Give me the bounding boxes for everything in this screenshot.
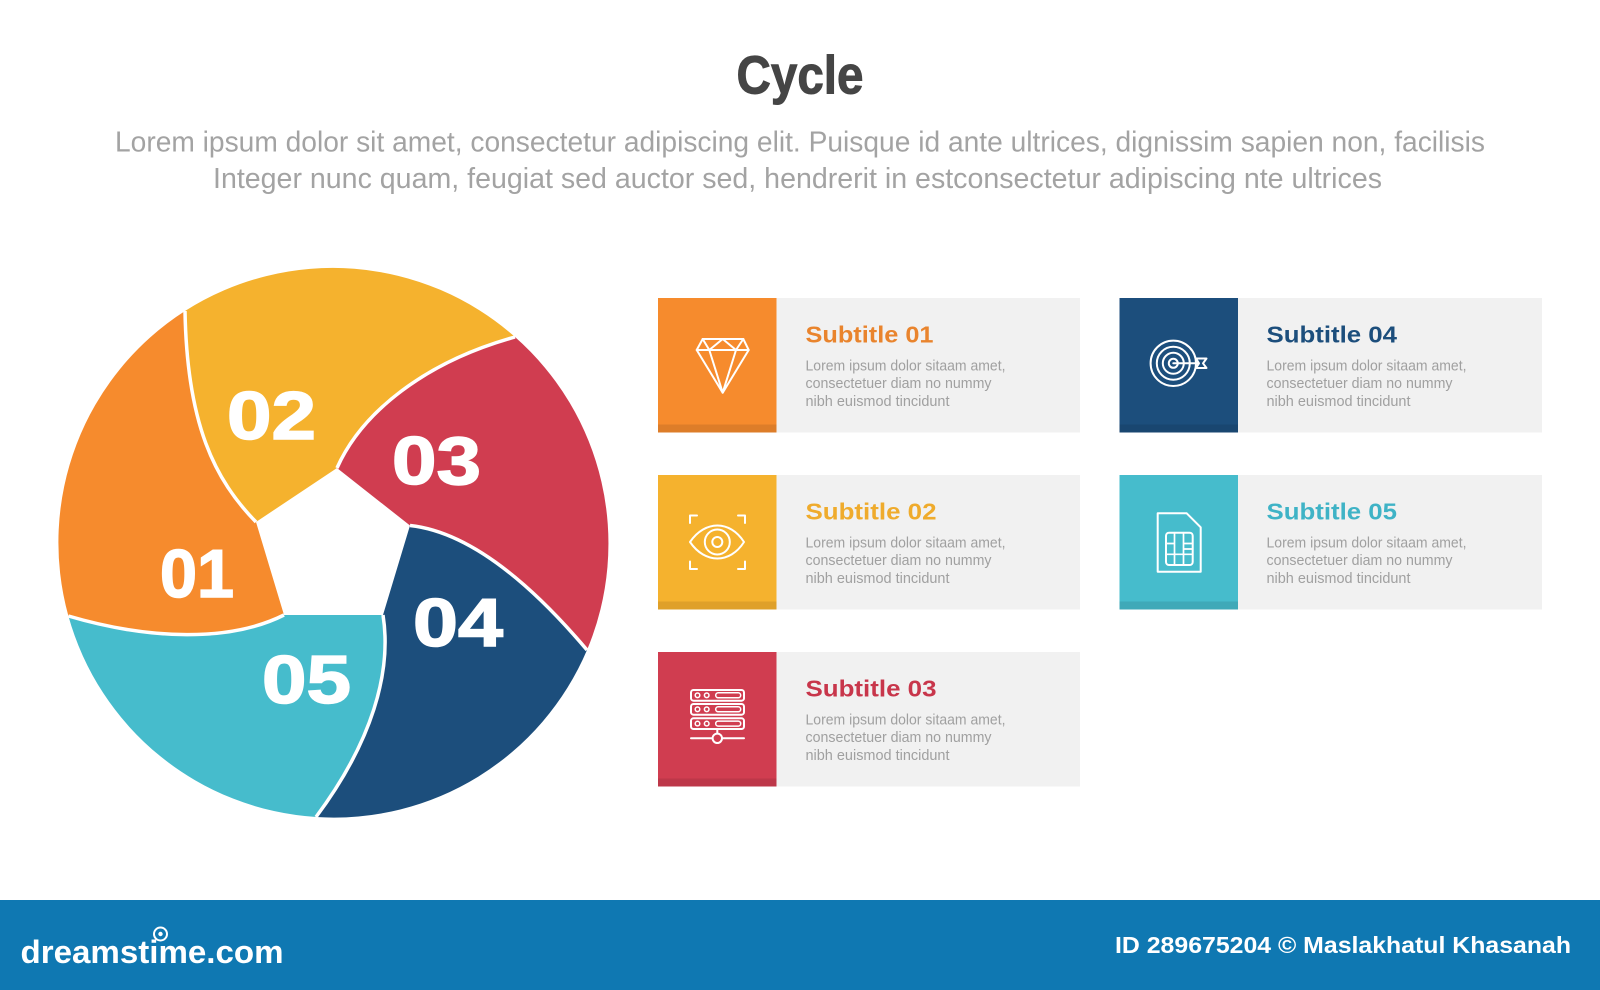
body text: nibh euismod tincidunt xyxy=(806,571,950,587)
body text: Lorem ipsum dolor sitaam amet, xyxy=(1266,358,1466,374)
footer banner xyxy=(0,900,1600,990)
intro text: Integer nunc quam, feugiat sed auctor sed, hendrerit in estconsectetur adipiscing nte ultrices xyxy=(213,163,1382,195)
segment 03 xyxy=(337,337,608,650)
body text: consectetuer diam no nummy xyxy=(806,376,992,392)
number 05: 05 xyxy=(262,642,351,718)
icon: target with arrow xyxy=(1151,341,1206,386)
number 02: 02 xyxy=(227,378,316,454)
body text: consectetuer diam no nummy xyxy=(1266,376,1453,392)
body text: consectetuer diam no nummy xyxy=(806,553,992,569)
footer logo: dreamstime.com xyxy=(20,934,284,970)
body text: consectetuer diam no nummy xyxy=(806,730,992,746)
heading: Subtitle 05 xyxy=(1266,498,1397,524)
number 01: 01 xyxy=(160,536,234,612)
body text: Lorem ipsum dolor sitaam amet, xyxy=(806,535,1006,551)
segment 05 xyxy=(68,615,385,817)
heading: Subtitle 02 xyxy=(806,498,936,524)
panel: subtitle 01 xyxy=(658,298,1080,432)
body text: nibh euismod tincidunt xyxy=(806,394,950,410)
intro text xyxy=(115,126,1485,195)
icon: sim card xyxy=(1158,513,1201,572)
title: Cycle xyxy=(736,46,864,106)
body text xyxy=(1266,358,1466,410)
body text: Lorem ipsum dolor sitaam amet, xyxy=(1266,535,1466,551)
segment 01 xyxy=(58,311,284,635)
panel: subtitle 03 xyxy=(658,652,1080,786)
body text: nibh euismod tincidunt xyxy=(806,748,950,764)
panel: subtitle 02 xyxy=(658,475,1080,610)
body text xyxy=(806,712,1006,764)
segment 04 xyxy=(316,526,587,818)
number 04: 04 xyxy=(413,585,503,661)
body text: nibh euismod tincidunt xyxy=(1266,394,1410,410)
body text: Lorem ipsum dolor sitaam amet, xyxy=(806,712,1006,728)
body text: nibh euismod tincidunt xyxy=(1266,571,1410,587)
number 03: 03 xyxy=(392,423,481,499)
cycle chart xyxy=(58,268,608,818)
icon: diamond xyxy=(697,339,749,393)
icon: server rack xyxy=(691,690,744,743)
panel: subtitle 05 xyxy=(1120,475,1542,610)
panel: subtitle 04 xyxy=(1120,298,1542,432)
icon: eye xyxy=(690,516,745,569)
footer credit: ID 289675204 © Maslakhatul Khasanah xyxy=(1115,932,1571,958)
intro text: Lorem ipsum dolor sit amet, consectetur adipiscing elit. Puisque id ante ultrices, dignissim sapien non, facilisis xyxy=(115,126,1485,158)
heading: Subtitle 04 xyxy=(1266,322,1397,348)
body text: Lorem ipsum dolor sitaam amet, xyxy=(806,358,1006,374)
heading: Subtitle 01 xyxy=(806,322,934,348)
body text xyxy=(1266,535,1466,587)
segment 02 xyxy=(185,268,515,522)
heading: Subtitle 03 xyxy=(806,676,936,702)
body text xyxy=(806,535,1006,587)
body text xyxy=(806,358,1006,410)
body text: consectetuer diam no nummy xyxy=(1266,553,1453,569)
